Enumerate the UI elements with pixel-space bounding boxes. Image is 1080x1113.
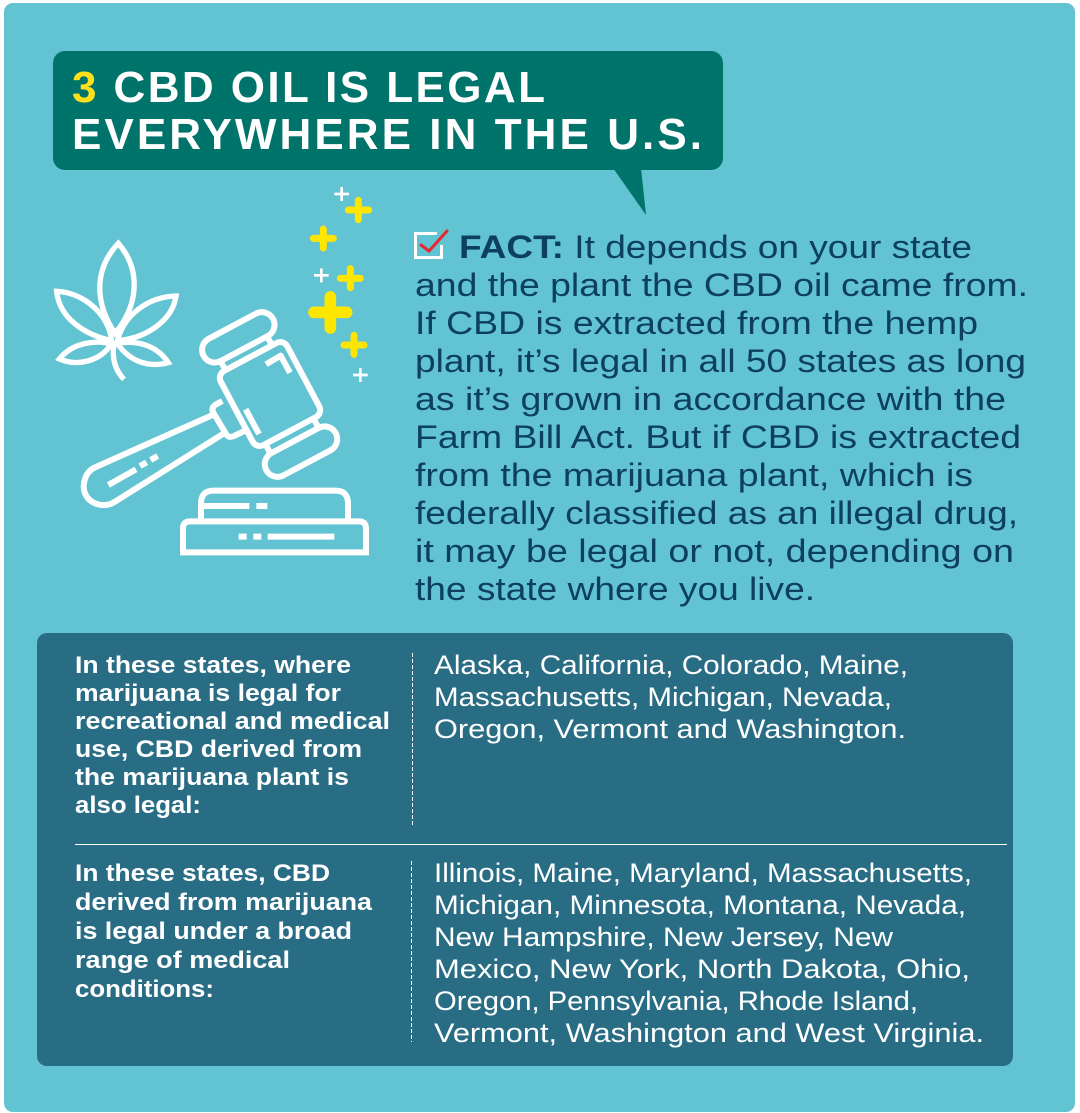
- icon: cannabis leaf: [57, 243, 176, 379]
- heading text: 3 CBD OIL IS LEGAL: [72, 63, 545, 112]
- fact text block: [415, 229, 1028, 607]
- recreational label: [75, 652, 390, 819]
- recreational states: Oregon, Vermont and Washington.: [434, 714, 906, 744]
- recreational label: recreational and medical: [75, 708, 390, 735]
- medical states: New Hampshire, New Jersey, New: [434, 922, 894, 952]
- icon: checkbox: [416, 231, 447, 258]
- recreational states: Alaska, California, Colorado, Maine,: [434, 650, 908, 680]
- fact text block: plant, it’s legal in all 50 states as long: [415, 343, 1026, 379]
- recreational label: the marijuana plant is: [75, 764, 349, 791]
- icon: gavel: [84, 308, 342, 505]
- fact text block: it may be legal or not, depending on: [415, 533, 1014, 569]
- recreational states: [434, 650, 908, 744]
- medical states: Mexico, New York, North Dakota, Ohio,: [434, 954, 970, 984]
- fact text block: Farm Bill Act. But if CBD is extracted: [415, 419, 1021, 455]
- medical states: [434, 858, 984, 1048]
- heading speech bubble: [53, 51, 723, 215]
- icon: sparkles: [313, 187, 369, 382]
- medical label: In these states, CBD: [75, 860, 330, 887]
- medical states: Michigan, Minnesota, Montana, Nevada,: [434, 890, 966, 920]
- recreational states: Massachusetts, Michigan, Nevada,: [434, 682, 892, 712]
- medical label: is legal under a broad: [75, 918, 352, 945]
- fact text block: If CBD is extracted from the hemp: [415, 305, 978, 341]
- medical label: [75, 860, 373, 1003]
- panel: state table: [37, 633, 1013, 1066]
- medical states: Illinois, Maine, Maryland, Massachusetts,: [434, 858, 972, 888]
- icon: sound block: [183, 491, 366, 552]
- fact text block: the state where you live.: [415, 571, 815, 607]
- gavel head: [217, 339, 323, 449]
- medical states: Oregon, Pennsylvania, Rhode Island,: [434, 986, 918, 1016]
- recreational label: use, CBD derived from: [75, 736, 362, 763]
- fact text block: FACT: It depends on your state: [459, 229, 972, 265]
- recreational label: marijuana is legal for: [75, 680, 341, 707]
- fact text block: federally classified as an illegal drug,: [415, 495, 1018, 531]
- medical label: derived from marijuana: [75, 889, 373, 916]
- heading text: [72, 63, 702, 159]
- gavel handle: [212, 401, 245, 437]
- recreational label: In these states, where: [75, 652, 351, 679]
- fact text block: and the plant the CBD oil came from.: [415, 267, 1028, 303]
- medical states: Vermont, Washington and West Virginia.: [434, 1018, 984, 1048]
- heading text: EVERYWHERE IN THE U.S.: [72, 110, 702, 159]
- recreational label: also legal:: [75, 792, 201, 819]
- fact text block: as it’s grown in accordance with the: [415, 381, 1006, 417]
- fact text block: from the marijuana plant, which is: [415, 457, 973, 493]
- medical label: range of medical: [75, 947, 290, 974]
- medical label: conditions:: [75, 976, 214, 1003]
